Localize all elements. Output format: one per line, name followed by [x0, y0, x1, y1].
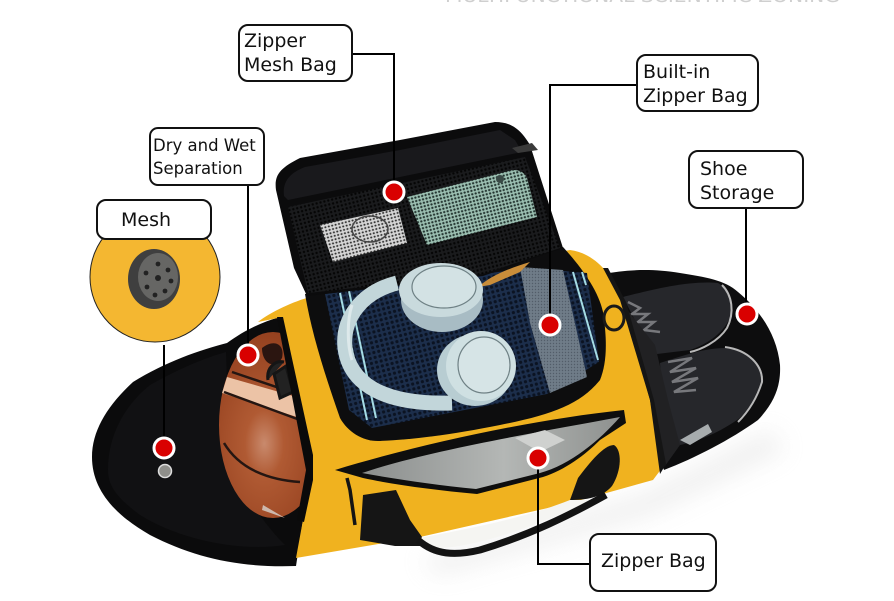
- side ring: [604, 306, 624, 330]
- grey towel band: [520, 267, 587, 393]
- main compartment rim: [305, 247, 606, 441]
- phone behind mesh: [407, 170, 537, 245]
- shoe upper: [623, 282, 732, 354]
- callout: Zipper Bag: Zipper Bag: [601, 550, 706, 572]
- lower ear cup: [437, 331, 516, 406]
- inner fold panel: [618, 298, 680, 466]
- callout: Mesh with magnified vent: Mesh: [121, 209, 171, 231]
- callout: Zipper Mesh Bag: Mesh Bag: [244, 54, 337, 76]
- basketball: [219, 332, 306, 518]
- callout: Mesh with magnified vent: [90, 200, 220, 449]
- phone cameras: [496, 175, 504, 183]
- top flap with mesh pocket: [276, 122, 563, 296]
- zipper pull: [347, 478, 355, 525]
- callout: Zipper Mesh Bag: [239, 25, 394, 192]
- callout: Zipper Mesh Bag: Zipper: [244, 30, 306, 52]
- callout: Built-in Zipper Bag: Zipper Bag: [643, 85, 748, 107]
- headphones: [345, 263, 516, 406]
- callout: Built-in Zipper Bag: [550, 55, 758, 325]
- magnified fabric circle: [90, 212, 220, 342]
- callout: Shoe Storage: Shoe: [700, 158, 747, 180]
- strip on the right edge of the body: [603, 268, 666, 474]
- zipper pull on flap: [512, 143, 538, 153]
- carry handle and straps: [360, 445, 620, 553]
- towel in main compartment: [325, 262, 599, 428]
- callout: Dry and Wet Separation: Dry and Wet: [153, 136, 256, 155]
- mesh eyelet: [158, 464, 172, 478]
- callout: Shoe Storage: Storage: [700, 182, 774, 204]
- callout: Shoe Storage: [689, 151, 803, 315]
- magnified mesh vent: [128, 249, 180, 309]
- right pouch with shoes: [603, 270, 780, 470]
- yellow main bag body: [258, 247, 666, 558]
- left pouch with basketball: [92, 317, 327, 566]
- callout: Dry and Wet Separation: Separation: [153, 159, 243, 178]
- front zipper pocket: [335, 410, 626, 525]
- callout: Dry and Wet Separation: [150, 128, 264, 355]
- mesh pocket: [288, 157, 560, 293]
- soft shadow under the bag: [420, 430, 785, 575]
- power bank behind mesh: [320, 208, 407, 262]
- red marker dots: [154, 182, 757, 468]
- black zipper strip: [277, 317, 313, 522]
- upper ear cup: [399, 263, 483, 332]
- shoe lower: [660, 348, 762, 445]
- callout: Built-in Zipper Bag: Built-in: [643, 61, 710, 83]
- callout: Zipper Bag: [538, 459, 716, 591]
- strap ring: [268, 362, 293, 398]
